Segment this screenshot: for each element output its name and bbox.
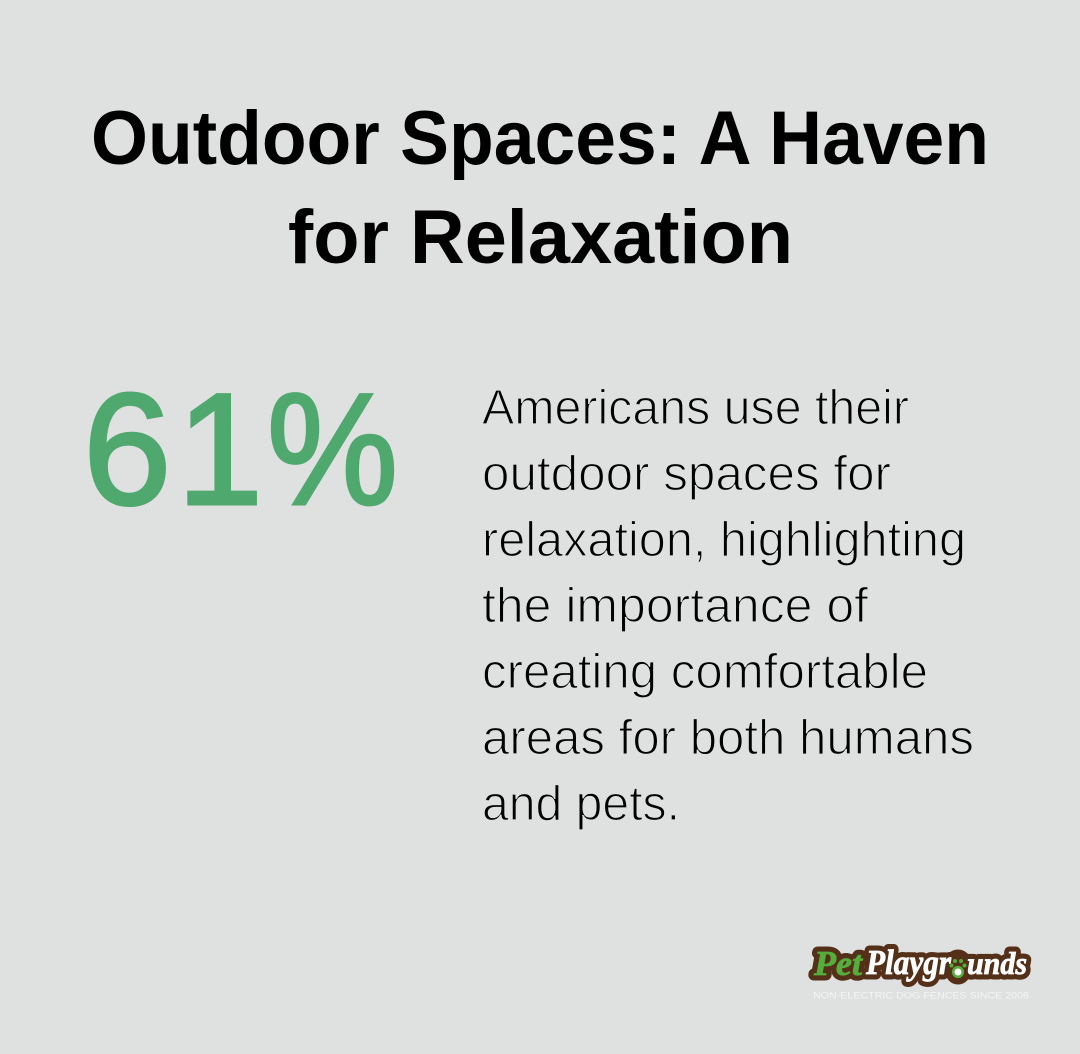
- description text: outdoor spaces for: [482, 447, 891, 501]
- logo tagline: NON-ELECTRIC DOG FENCES SINCE 2008: [813, 990, 1029, 1002]
- title: [91, 96, 989, 280]
- logo outline: unds: [967, 945, 1027, 981]
- big statistic: 61%: 6: [83, 360, 171, 538]
- description text: relaxation, highlighting: [482, 513, 966, 567]
- big statistic: 61%: 1: [177, 360, 263, 538]
- logo outline: [813, 943, 1027, 983]
- logo wordmark: Pet: [813, 944, 863, 983]
- big statistic: 61%: %: [267, 360, 398, 538]
- logo wordmark: Playgr: [865, 943, 951, 982]
- icon: paw print: [950, 959, 966, 977]
- description text: creating comfortable: [482, 645, 928, 699]
- logo outline: Playgr: [865, 943, 951, 982]
- logo outline: Pet: [813, 944, 863, 983]
- description text: areas for both humans: [482, 711, 974, 765]
- title: for Relaxation: [288, 195, 793, 280]
- logo: Pet Playgrounds: [813, 943, 1029, 1002]
- description text: [482, 381, 974, 831]
- description text: Americans use their: [482, 381, 909, 435]
- title: Outdoor Spaces: A Haven: [91, 96, 989, 181]
- description text: the importance of: [482, 579, 868, 633]
- description text: and pets.: [482, 777, 680, 831]
- logo wordmark: unds: [967, 945, 1027, 981]
- logo wordmark: [813, 943, 1027, 983]
- big statistic: 61%: [83, 360, 398, 538]
